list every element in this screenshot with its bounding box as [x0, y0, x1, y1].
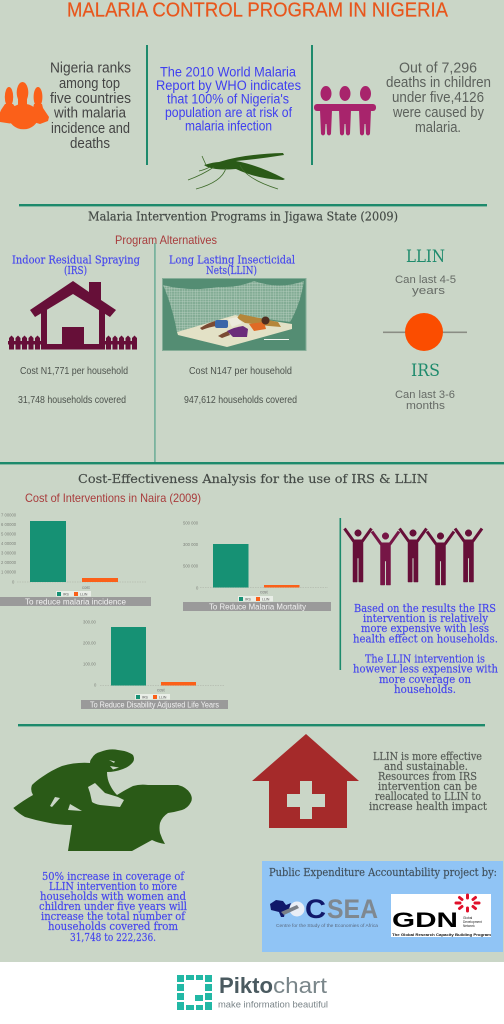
- text: 50% increase: 31,748 to 222,236.: [70, 931, 156, 944]
- icon: people arms raised: [344, 528, 482, 585]
- text: Piktochart wordmark: Pikto: [219, 973, 273, 998]
- chart: reduce malaria incidence: 2 00000: [1, 560, 17, 565]
- logo: GDN: Network: [463, 924, 475, 928]
- logo: GDN: Global: [463, 916, 473, 920]
- text: deaths in children: malaria.: [415, 119, 461, 136]
- text: LLIN more effective: LLIN is more effective: [373, 750, 482, 763]
- text: LLIN lasts: years: [412, 285, 446, 297]
- divider: results: [340, 518, 341, 670]
- text: 50% increase: households covered from: [48, 920, 179, 933]
- text: LLIN more effective: increase health impact: [369, 800, 488, 813]
- chart: reduce malaria incidence: 1 00000: [1, 570, 17, 574]
- heading: LLIN: Long Lasting Insecticidal: [169, 254, 295, 266]
- text: 50% increase: children under five years will: [39, 900, 187, 913]
- chart: reduce malaria incidence: cost: [82, 585, 91, 590]
- logo: GDN: Development: [463, 920, 482, 924]
- logo: GDN: The Global Research Capacity Building Program: [392, 933, 491, 937]
- chart: reduce malaria mortality: cost: [260, 590, 269, 594]
- text: results: The LLIN intervention is: [365, 652, 485, 666]
- logo: CSEA: SEA: [327, 894, 378, 924]
- chart: reduce malaria incidence: To reduce malaria incidence: [25, 598, 127, 606]
- chart: reduce DALYs: 200.00: [83, 640, 96, 646]
- heading: LLIN: Nets(LLIN): [206, 264, 257, 277]
- text: Nigeria ranks: incidence and: [51, 120, 130, 137]
- text: Nigeria ranks: deaths: [70, 135, 110, 152]
- chart: reduce malaria mortality: [183, 520, 331, 612]
- text: IRS cost: Cost N1,771 per household: [20, 366, 128, 377]
- icon: mosquito: [188, 153, 285, 189]
- divider: section 2: [19, 204, 487, 206]
- divider: section 4: [18, 724, 485, 726]
- chart: reduce malaria incidence: 7 00000: [1, 512, 17, 518]
- panel: LLIN: [162, 254, 306, 406]
- chart: reduce malaria mortality: 500 000: [183, 564, 199, 568]
- heading: program alternatives: Program Alternatives: [115, 233, 217, 247]
- icon: mother and child: [13, 749, 192, 851]
- chart: reduce malaria incidence: 6 00000: [1, 522, 17, 527]
- text: Nigeria ranks: with malaria: [53, 104, 127, 122]
- icon: health house: [252, 734, 359, 828]
- text: LLIN cost: Cost N147 per household: [189, 366, 292, 377]
- heading: cost-effectiveness: Cost-Effectiveness Analysis for the use of IRS & LLIN: [78, 471, 428, 486]
- icon: orange circle: [405, 313, 443, 351]
- text: results: more coverage on: [379, 673, 471, 686]
- chart: reduce DALYs: To Reduce Disability Adjusted Life Years: [90, 700, 219, 710]
- heading: intervention programs: Malaria Intervention Programs in Jigawa State (2009): [88, 208, 398, 224]
- chart: reduce malaria incidence: IRS: [63, 592, 70, 596]
- logo: CSEA: Centre for the Study of the Economies of Africa: [276, 923, 379, 928]
- chart: reduce DALYs: 300.00: [83, 620, 96, 624]
- chart: reduce malaria incidence: 4 00000: [1, 541, 17, 546]
- logo: CSEA: C: [305, 894, 326, 924]
- text: LLIN more effective: and sustainable.: [384, 760, 468, 773]
- text: 50% increase: LLIN intervention to more: [49, 880, 177, 893]
- text: IRS lasts: Can last 3-6: [395, 389, 455, 401]
- label: IRS durability: IRS: [411, 361, 440, 381]
- text: deaths in children: Out of 7,296: [399, 60, 477, 76]
- divider: IRS vs LLIN: [154, 243, 156, 462]
- text: WHO report: Report by WHO indicates: [156, 78, 301, 93]
- chart: reduce DALYs: LLIN: [159, 696, 167, 700]
- chart: reduce malaria incidence: 3 00000: [1, 550, 17, 556]
- text: Nigeria ranks: Nigeria ranks: [50, 60, 131, 76]
- text: LLIN more effective: Resources from IRS: [378, 770, 477, 783]
- text: 50% increase: increase the total number of: [41, 910, 186, 923]
- chart: reduce malaria incidence: 5 00000: [1, 532, 17, 536]
- text: WHO report: population are at risk of: [165, 105, 292, 120]
- text: tagline: make information beautiful: [218, 1000, 328, 1010]
- chart: reduce DALYs: 0: [94, 682, 97, 688]
- chart: reduce malaria mortality: IRS: [245, 598, 252, 602]
- logo: CSEA: [270, 894, 379, 928]
- text: Nigeria ranks: among top: [59, 75, 120, 92]
- text: LLIN more effective: intervention can be: [378, 780, 477, 793]
- icon: magenta people: [314, 86, 376, 136]
- chart: reduce malaria mortality: To Reduce Malaria Mortality: [209, 602, 306, 612]
- logo: GDN: [391, 894, 491, 937]
- text: WHO report: The 2010 World Malaria: [160, 64, 296, 80]
- text: WHO report: malaria infection: [185, 118, 272, 134]
- text: LLIN more effective: reallocated to LLIN to: [375, 790, 481, 803]
- text: LLIN coverage: 947,612 households covered: [184, 395, 297, 406]
- text: results: more expensive with less: [361, 622, 489, 635]
- text: results: intervention is relatively: [363, 612, 489, 625]
- text: IRS coverage: 31,748 households covered: [18, 395, 126, 406]
- logo: GDN: GDN: [392, 909, 458, 932]
- chart: reduce DALYs: [81, 620, 228, 710]
- label: LLIN durability: LLIN: [406, 247, 445, 267]
- chart: reduce malaria mortality: 0: [196, 586, 199, 590]
- chart: reduce malaria incidence: 0: [12, 580, 15, 584]
- chart: reduce malaria incidence: [0, 512, 151, 606]
- panel: IRS: [8, 254, 144, 406]
- text: Piktochart wordmark: chart: [273, 973, 327, 998]
- logo: Piktochart mark: [177, 975, 212, 1010]
- text: IRS lasts: months: [406, 400, 446, 412]
- chart: reduce malaria incidence: LLIN: [80, 592, 88, 596]
- text: WHO report: that 100% of Nigeria's: [167, 92, 289, 106]
- footer: Piktochart: [0, 962, 504, 1024]
- text: Nigeria ranks: five countries: [50, 90, 131, 107]
- image: bed net: [162, 278, 306, 350]
- chart: reduce DALYs: IRS: [142, 696, 148, 700]
- panel: durability comparison: [383, 247, 467, 412]
- icon: house: [8, 281, 137, 350]
- heading: IRS: (IRS): [64, 264, 87, 277]
- chart: reduce DALYs: 100.00: [83, 662, 96, 666]
- chart: reduce malaria mortality: 500 000: [183, 520, 199, 526]
- text: deaths in children: under five,4126: [392, 89, 484, 106]
- text: LLIN lasts: Can last 4-5: [395, 274, 456, 286]
- heading: cost of interventions: Cost of Interventions in Naira (2009): [25, 491, 201, 505]
- text: 50% increase: 50% increase in coverage of: [42, 870, 185, 883]
- text: results: households.: [394, 683, 456, 696]
- heading: IRS: Indoor Residual Spraying: [12, 254, 140, 266]
- chart: reduce malaria mortality: LLIN: [262, 598, 270, 602]
- chart: reduce malaria mortality: 300 000: [183, 542, 199, 547]
- panel: project sponsors: [262, 861, 503, 952]
- text: 50% increase: households with women and: [40, 890, 186, 903]
- text: deaths in children: were caused by: [392, 104, 484, 121]
- chart: reduce DALYs: cost: [157, 688, 166, 692]
- icon: orange people group: [0, 82, 49, 129]
- text: deaths in children: deaths in children: [386, 74, 491, 91]
- panel: key facts: [0, 45, 495, 189]
- divider: section 3: [0, 462, 504, 464]
